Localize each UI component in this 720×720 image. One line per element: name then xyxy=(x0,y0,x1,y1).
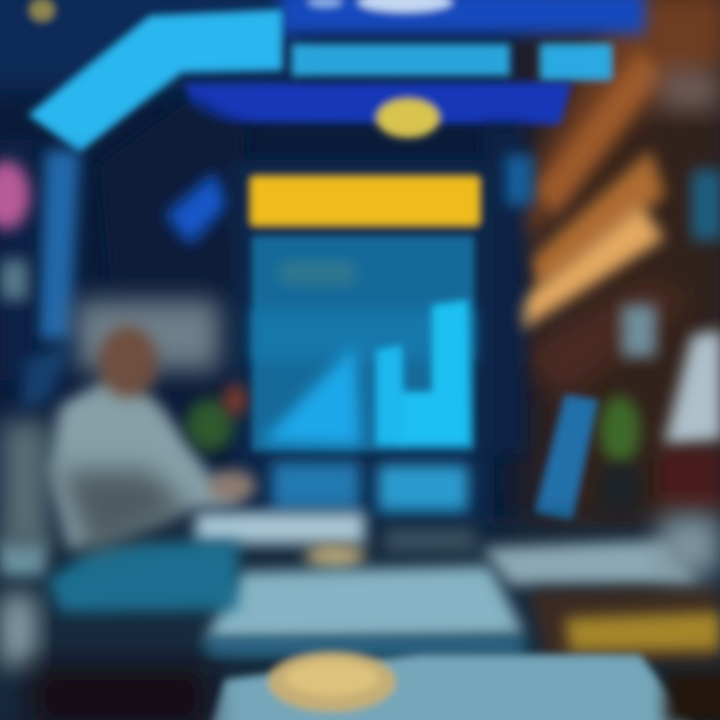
panel: dark inner arch xyxy=(0,100,533,480)
heading: yellow banner xyxy=(250,176,480,226)
chart: U shaped bars xyxy=(376,300,470,445)
chart: rising area xyxy=(262,345,360,445)
panel: seated man xyxy=(0,300,256,555)
panel: desk surfaces xyxy=(0,512,720,720)
panel: bookshelves on the right xyxy=(505,0,720,560)
text block: blurred screen caption xyxy=(280,262,355,284)
icon: yellow oval emblem xyxy=(376,98,440,138)
panel: ceiling and arch xyxy=(0,0,645,152)
lower screen panels xyxy=(272,462,360,510)
icon: golden plate xyxy=(268,652,396,712)
screen body xyxy=(252,236,474,451)
panel: central screen xyxy=(232,160,494,530)
